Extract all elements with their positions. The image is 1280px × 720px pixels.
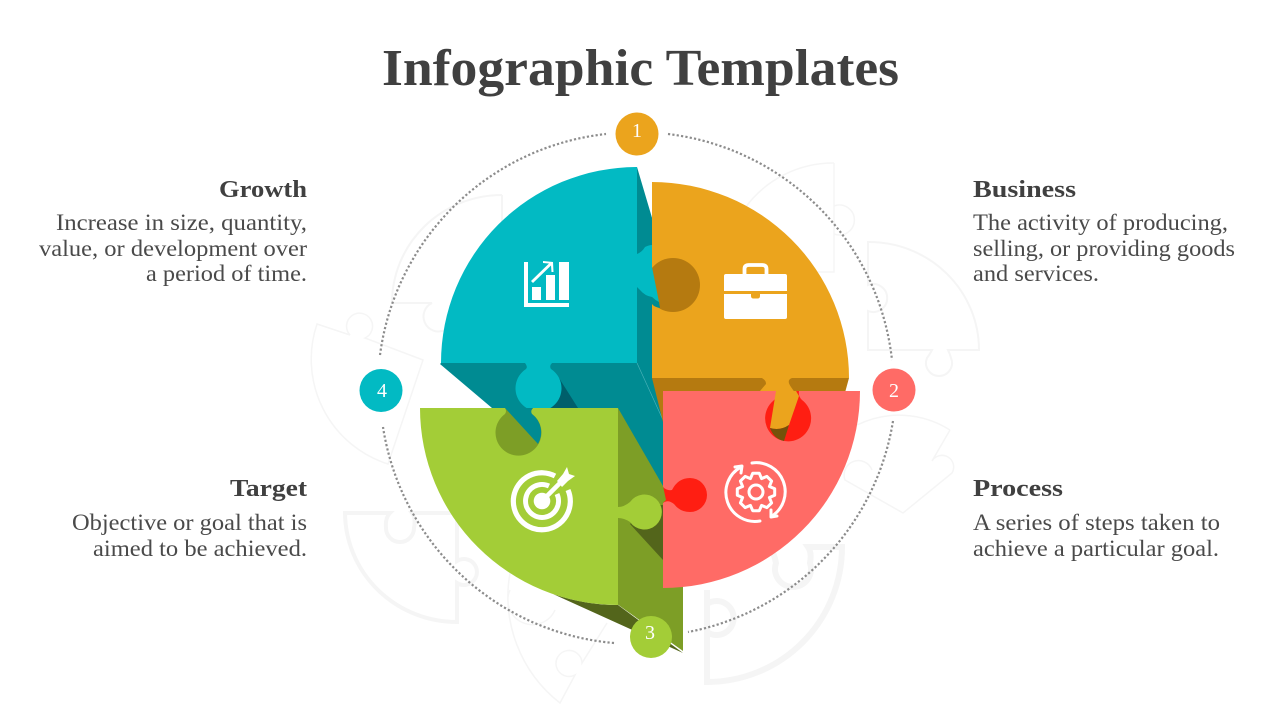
text block: business [973,177,1235,286]
puzzle piece: orange business [646,182,849,422]
background ghost puzzle pieces [311,163,979,703]
step 2 badge: 2 [889,380,899,402]
text block: target: Target [230,476,307,502]
text block: process [973,476,1220,561]
icon: target [513,467,575,530]
step 1 badge: 1 [632,120,642,142]
step 4 badge [360,369,402,412]
text block: process: A series of steps taken to [973,510,1220,535]
icon: bar chart [524,261,569,307]
puzzle piece: teal growth [440,167,663,500]
text block: business: The activity of producing, [973,210,1228,235]
text block: process: Process [973,476,1063,502]
text block: growth: value, or development over [39,236,307,261]
icon: briefcase [724,265,787,319]
dotted ring [380,134,893,643]
puzzle piece: red process [663,391,860,588]
text block: target [72,476,307,561]
step 1 badge [616,112,658,156]
step 3 badge [630,616,672,658]
text block: business: selling, or providing goods [973,236,1235,261]
step 4 badge: 4 [377,380,387,402]
icon: gear with cycle arrows [726,463,785,521]
text block: business: Business [973,177,1076,203]
puzzle piece: green target [420,408,683,653]
text block: growth: Growth [219,177,307,203]
text block: growth: Increase in size, quantity, [56,210,307,235]
text block: target: aimed to be achieved. [93,536,307,561]
step 2 badge [872,368,916,412]
step 3 badge: 3 [645,622,655,644]
text block: growth: a period of time. [146,261,307,286]
text block: growth [39,177,307,286]
text block: process: achieve a particular goal. [973,536,1219,561]
text block: business: and services. [973,261,1099,286]
title: Infographic Templates [382,40,899,97]
text block: target: Objective or goal that is [72,510,307,535]
